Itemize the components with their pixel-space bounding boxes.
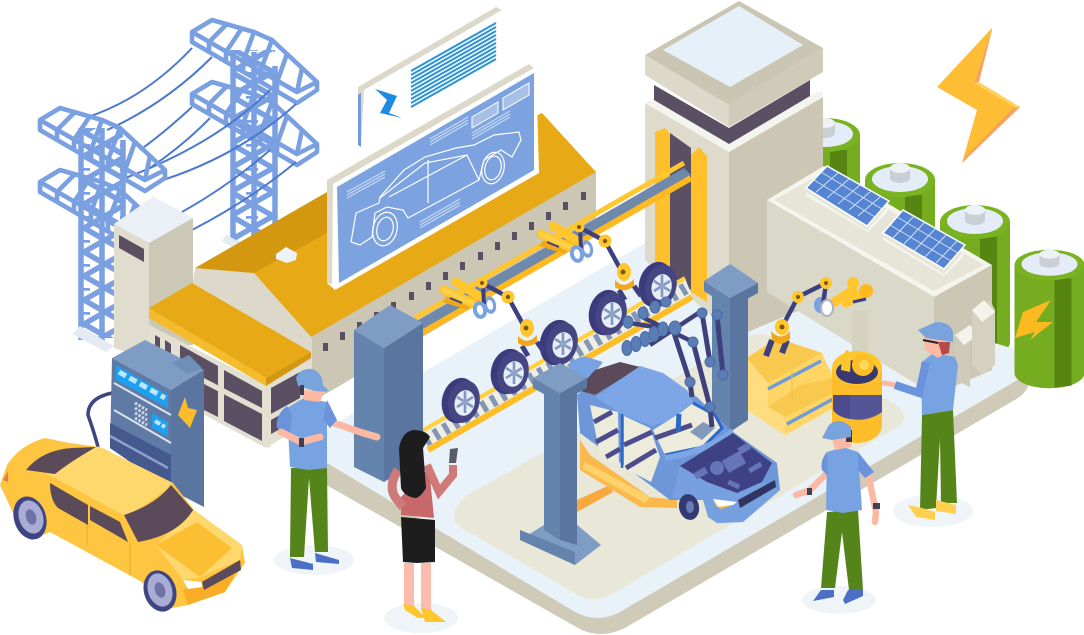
billboard: back white panel with text lines <box>358 7 503 147</box>
right tower <box>645 1 823 340</box>
worker 2 <box>796 421 880 614</box>
power lines between pylons <box>88 48 296 230</box>
solar building <box>767 166 995 395</box>
woman with phone <box>384 430 458 633</box>
boxes stack <box>747 338 833 435</box>
factory: wing wall <box>149 325 312 448</box>
tower: yellow left post <box>655 128 670 270</box>
car side windows <box>50 483 128 542</box>
building side fins <box>955 300 995 387</box>
barrel with coil <box>832 350 882 443</box>
pillar: front blue column with base <box>520 363 601 565</box>
car door lines <box>87 525 130 575</box>
factory: roof shaded plane <box>195 192 327 273</box>
bolt on charger <box>178 397 197 428</box>
car side windows <box>590 403 722 482</box>
car dark sunroof <box>577 362 640 395</box>
rear wheel <box>8 492 52 544</box>
battery: green cell 4 with bolt <box>1014 250 1084 388</box>
tower: cap <box>645 55 729 127</box>
chassis: orange frame <box>577 440 677 512</box>
overhead conveyor <box>415 163 691 337</box>
tower: doorway <box>670 133 691 290</box>
car lights and grille <box>183 580 202 589</box>
tires on conveyor <box>437 258 681 427</box>
car roof <box>40 447 173 516</box>
car hood <box>156 522 232 577</box>
overhead robot rig <box>622 297 728 427</box>
tower: yellow right post <box>691 147 707 302</box>
front wheel <box>138 566 182 616</box>
icon: lightning bolt <box>937 28 1020 163</box>
factory: small windows <box>323 192 586 351</box>
factory: long wall <box>312 172 596 402</box>
platform: beige inner floor <box>454 334 904 599</box>
pillar: left blue column <box>354 305 423 482</box>
headlight <box>713 499 737 507</box>
battery: green cell 3 <box>940 205 1010 359</box>
charger small screen <box>152 413 168 437</box>
car hood frame <box>665 431 733 458</box>
solar panel 1 <box>806 166 889 232</box>
factory building <box>149 113 596 448</box>
billboard: car blueprint <box>327 64 539 290</box>
car on assembly line <box>567 357 780 523</box>
blueprint car outline <box>351 132 521 248</box>
car roof <box>595 366 693 426</box>
charger keypad <box>135 403 147 425</box>
charging station <box>88 340 204 507</box>
blueprint labels <box>347 83 529 228</box>
front grille <box>738 480 776 508</box>
pillar: back blue column <box>704 264 758 432</box>
robot arm 2 <box>539 222 641 300</box>
car hood rim <box>156 510 242 580</box>
worker 3 <box>884 322 973 527</box>
engine bay <box>680 433 772 493</box>
platform <box>300 242 1029 634</box>
car rear roof <box>567 357 603 385</box>
robot arm 3 with gripper <box>766 277 873 357</box>
logo bolt <box>375 89 402 118</box>
car body <box>577 366 780 523</box>
text lines <box>411 23 496 107</box>
lower tire conveyor <box>422 278 692 450</box>
charger screen <box>116 365 168 408</box>
yellow car <box>0 438 245 616</box>
battery: green cell 2 <box>865 163 935 317</box>
solar panel 2 <box>883 210 965 276</box>
factory: dark doors <box>155 335 300 441</box>
car rear window <box>26 447 96 474</box>
car lower front <box>183 560 243 605</box>
pylon: front transmission tower <box>40 108 165 352</box>
tower: white rim <box>645 90 823 152</box>
pylon: back transmission tower <box>192 20 317 250</box>
car body <box>0 438 245 610</box>
charging cable <box>88 393 112 447</box>
tower: dark band <box>654 80 810 144</box>
factory: main roof <box>195 113 596 337</box>
roof vent <box>276 247 297 263</box>
car windshield <box>124 485 193 542</box>
battery: green cell 1 <box>790 118 860 272</box>
car front bumper <box>672 466 780 523</box>
factory: gable end <box>190 268 312 405</box>
tower: left square tower <box>114 197 193 360</box>
factory: wing roof <box>149 283 311 378</box>
robot arm 1 <box>442 278 544 356</box>
factory: door bars <box>204 365 300 448</box>
front wheel <box>677 492 701 522</box>
worker 1 <box>274 369 377 575</box>
